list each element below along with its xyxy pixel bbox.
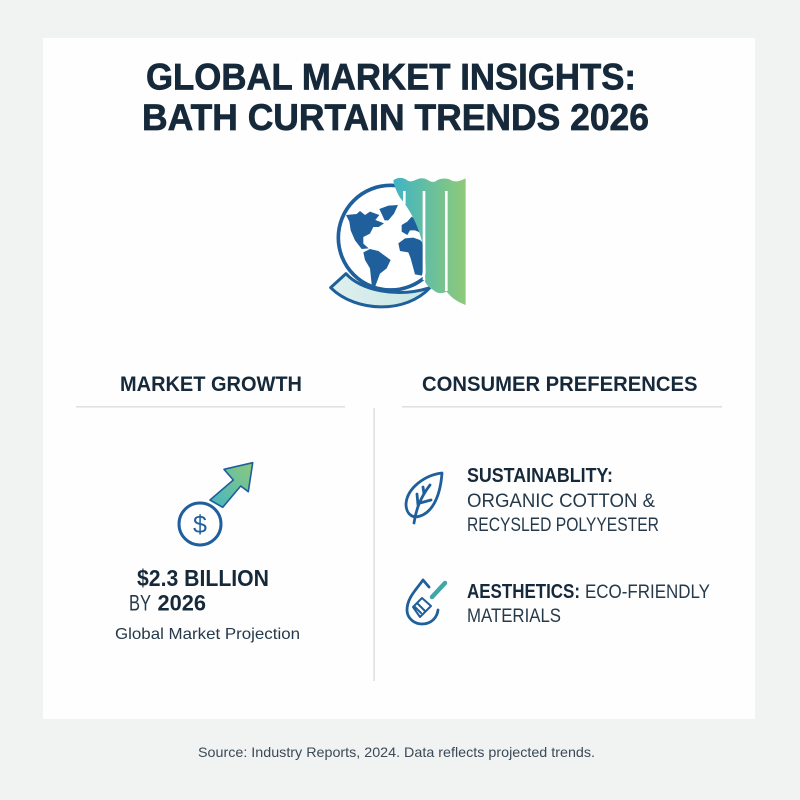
text: sustainability: RECYSLED POLYYESTER (467, 514, 659, 536)
heading: consumer preferences: CONSUMER PREFERENCES (422, 372, 698, 396)
icon: globe with curtain (331, 178, 466, 307)
panel: main card (43, 38, 755, 719)
title: BATH CURTAIN TRENDS 2026 (142, 96, 649, 138)
text: sustainability (467, 465, 659, 536)
text: aesthetics: ECO-FRIENDLY (585, 581, 710, 603)
stat: market value: 2026 (158, 590, 206, 616)
source footnote: Source: Industry Reports, 2024. Data reflects projected trends. (198, 744, 595, 760)
curtain folds (404, 191, 446, 291)
curtain (393, 178, 466, 305)
caption: global market projection: Global Market Projection (115, 626, 300, 643)
icon: growth arrow with dollar coin (179, 463, 253, 545)
stat: market value: BY (129, 590, 151, 616)
text: aesthetics (467, 581, 710, 627)
icon: leaf (406, 473, 442, 523)
text: sustainability: ORGANIC COTTON & (467, 490, 655, 512)
globe base crescent (331, 274, 430, 307)
stat: market value (129, 565, 269, 616)
growth arrow (210, 463, 253, 507)
title: GLOBAL MARKET INSIGHTS: (146, 56, 636, 98)
globe ring (338, 185, 443, 290)
heading: market growth: MARKET GROWTH (120, 372, 302, 396)
globe continents (346, 205, 425, 287)
icon: growth arrow with dollar coin: $ (193, 511, 207, 539)
icon: paint drop and brush (407, 580, 445, 624)
stat: market value: $2.3 BILLION (137, 565, 269, 591)
dollar coin (179, 503, 221, 545)
title (142, 56, 649, 138)
text: aesthetics: AESTHETICS: (467, 581, 580, 603)
text: sustainability: SUSTAINABLITY: (467, 465, 613, 487)
text: aesthetics: MATERIALS (467, 605, 561, 627)
